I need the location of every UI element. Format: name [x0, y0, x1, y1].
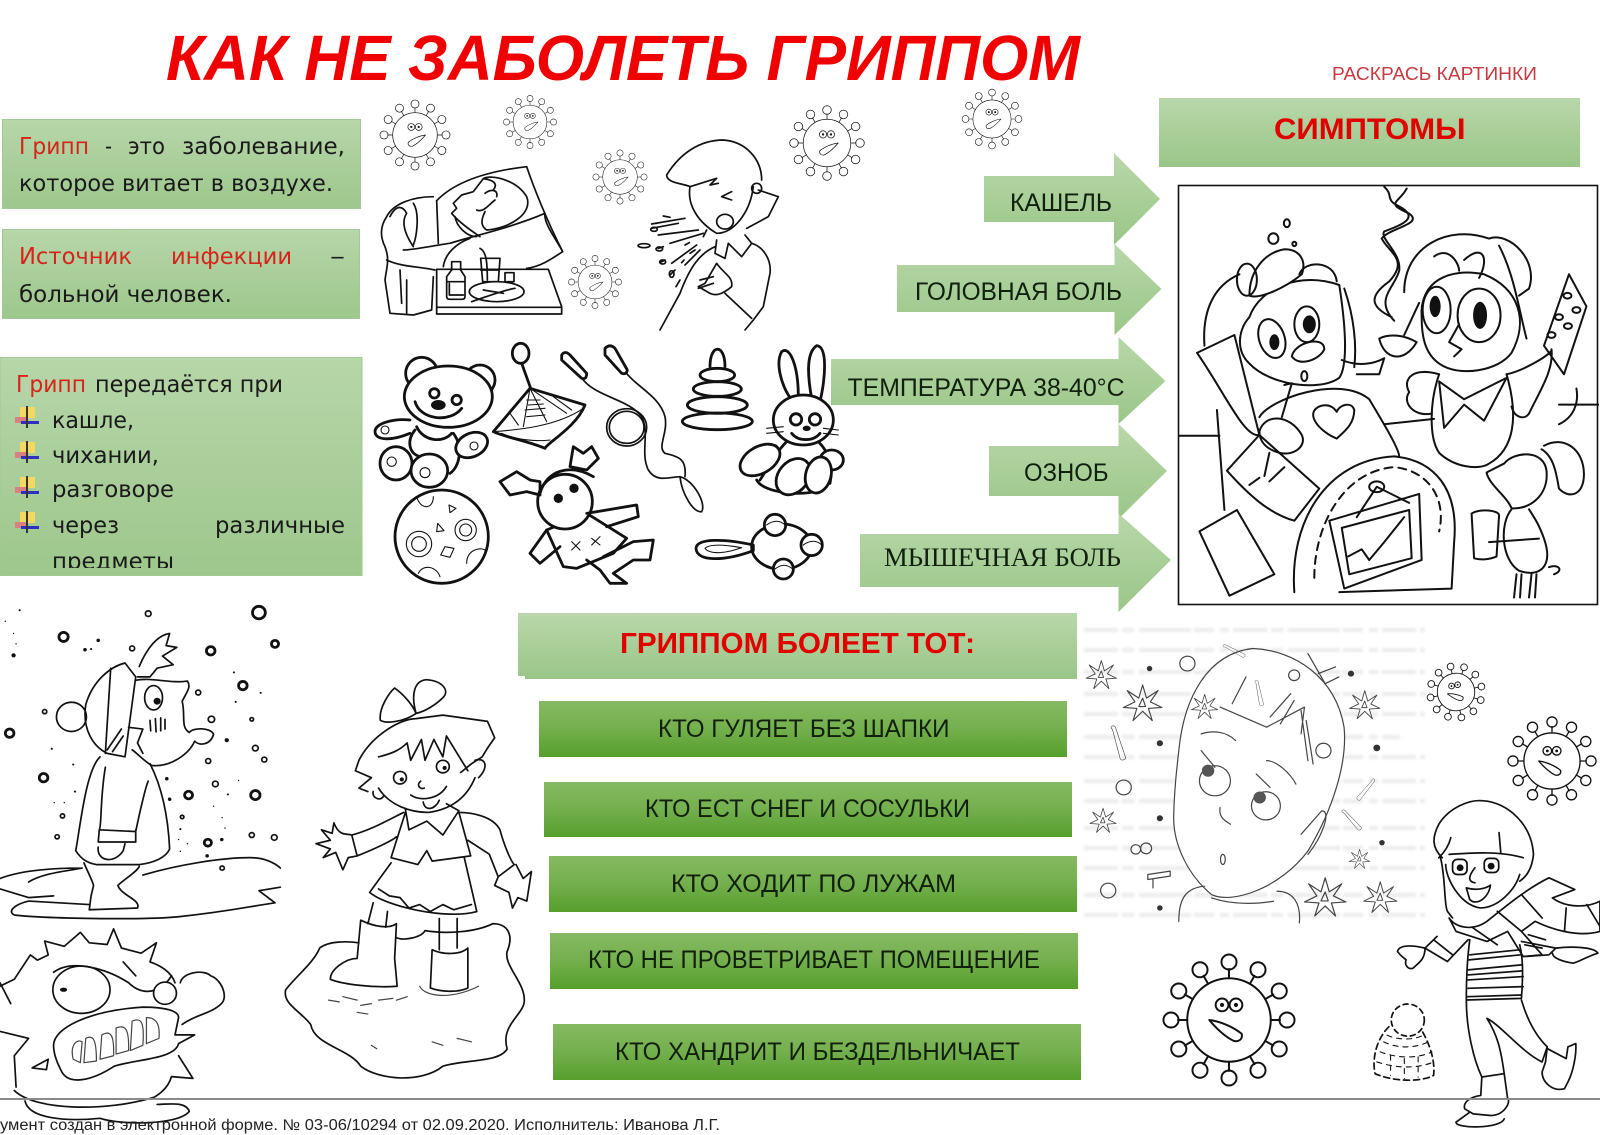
- list item: puddles: [549, 856, 1077, 912]
- illustration: rattle: [696, 514, 822, 579]
- list item: ventilation: КТО НЕ ПРОВЕТРИВАЕТ ПОМЕЩЕНИЕ: [588, 946, 1040, 974]
- panel: flu definition: заболевание,: [182, 134, 345, 160]
- panel: source of infection: [2, 230, 360, 318]
- panel: flu definition: Грипп: [19, 134, 89, 160]
- panel: transmission: предметы: [52, 549, 174, 575]
- panel: source of infection: инфекции: [171, 244, 292, 270]
- panel: flu definition: это: [128, 134, 165, 160]
- panel: source of infection: –: [330, 244, 345, 270]
- illustration: woolly hat: [1374, 1004, 1434, 1080]
- list item: eats snow: [544, 782, 1072, 837]
- list item: eats snow: КТО ЕСТ СНЕГ И СОСУЛЬКИ: [645, 795, 970, 823]
- icon: bullets: [15, 406, 39, 533]
- arrow: muscle pain: МЫШЕЧНАЯ БОЛЬ: [884, 543, 1121, 572]
- illustration: sick person in bed: [381, 167, 563, 315]
- illustration: girl in puddle: [285, 680, 531, 1078]
- panel: flu definition: [2, 120, 360, 208]
- panel: transmission: чихании,: [52, 443, 159, 469]
- arrow: cough: [984, 153, 1160, 245]
- illustration: doll: [500, 447, 653, 583]
- heading: who gets the flu: ГРИППОМ БОЛЕЕТ ТОТ:: [620, 628, 975, 660]
- list item: idle: КТО ХАНДРИТ И БЕЗДЕЛЬНИЧАЕТ: [615, 1038, 1020, 1066]
- arrow: chills: ОЗНОБ: [1024, 459, 1108, 487]
- heading: who gets the flu: [518, 613, 1077, 679]
- panel: source of infection: больной человек.: [19, 282, 232, 308]
- list item: puddles: КТО ХОДИТ ПО ЛУЖАМ: [671, 870, 956, 898]
- illustration: ball: [395, 490, 488, 583]
- illustration: angry germ monster: [0, 929, 224, 1123]
- illustration: jump rope: [562, 346, 703, 512]
- illustration: sick cartoon characters: [1178, 186, 1599, 604]
- arrow: chills: [989, 424, 1167, 519]
- arrow: headache: ГОЛОВНАЯ БОЛЬ: [915, 278, 1122, 306]
- arrow: temperature: [831, 337, 1166, 424]
- icon: virus group top: [380, 89, 1022, 309]
- panel: flu definition: -: [105, 134, 112, 160]
- arrow: headache: [897, 244, 1162, 335]
- illustration: toy rabbit: [735, 346, 843, 502]
- illustration: skating child with scarf: [1397, 801, 1600, 1127]
- footer rule: [0, 1098, 1600, 1100]
- panel: flu definition: которое витает в воздухе.: [19, 171, 333, 197]
- list item: ventilation: [550, 933, 1078, 989]
- list item: no hat: КТО ГУЛЯЕТ БЕЗ ШАПКИ: [658, 715, 950, 743]
- list item: no hat: [539, 701, 1067, 757]
- arrow: cough: КАШЕЛЬ: [1010, 189, 1112, 217]
- heading: symptoms: СИМПТОМЫ: [1274, 113, 1466, 146]
- panel: transmission: различные: [215, 513, 345, 539]
- illustration: spinning top: [493, 343, 585, 448]
- coloring hint: РАСКРАСЬ КАРТИНКИ: [1332, 63, 1537, 84]
- panel: transmission: разговоре: [52, 477, 174, 503]
- illustration: stacking pyramid: [682, 349, 752, 430]
- list item: idle: [553, 1024, 1081, 1080]
- title: КАК НЕ ЗАБОЛЕТЬ ГРИППОМ: [166, 22, 1082, 94]
- heading: symptoms: [1159, 98, 1580, 167]
- panel: transmission: кашле,: [52, 408, 134, 434]
- illustration: boy eating snow: [0, 606, 280, 919]
- panel: transmission: передаётся при: [95, 372, 283, 398]
- illustration: teddy bear: [375, 357, 495, 487]
- arrow: temperature: ТЕМПЕРАТУРА 38-40°С: [848, 374, 1124, 402]
- icon: snowflakes: [5, 606, 279, 870]
- footer text: умент создан в электронной форме. № 03-06/10294 от 02.09.2020. Исполнитель: Иванова Л.Г.: [0, 1117, 720, 1134]
- arrow: muscle pain: [860, 514, 1171, 612]
- panel: transmission: через: [52, 513, 119, 539]
- panel: transmission: [0, 358, 362, 576]
- icon: virus group bottom: [1163, 657, 1596, 1086]
- panel: source of infection: Источник: [19, 244, 132, 270]
- illustration: coughing woman: [638, 140, 778, 330]
- panel: transmission: Грипп: [16, 372, 86, 398]
- illustration: boy head among germs: [1084, 630, 1425, 923]
